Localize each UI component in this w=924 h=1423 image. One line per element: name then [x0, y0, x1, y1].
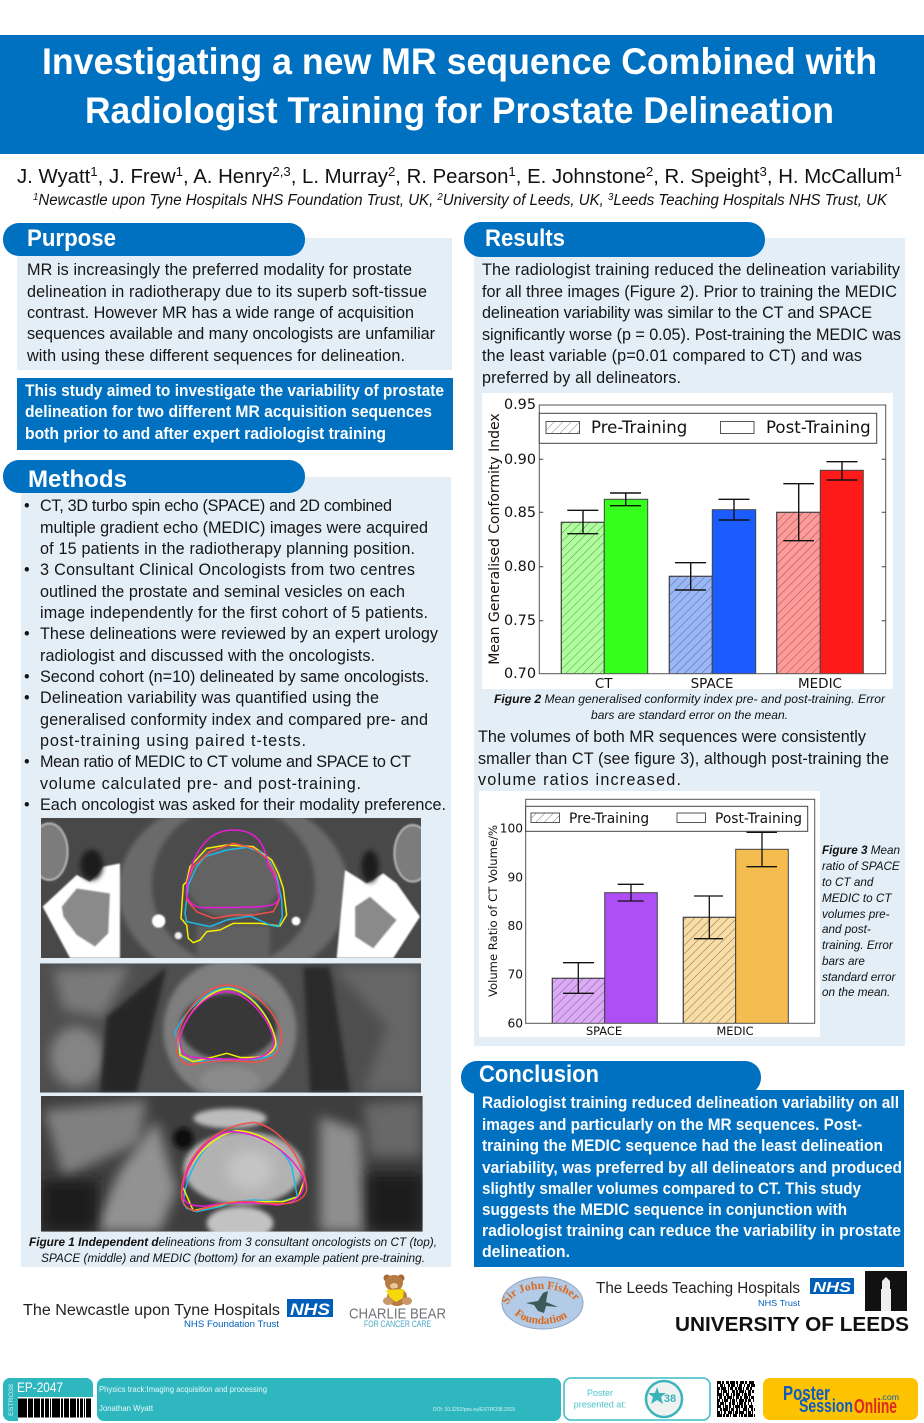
chart 2 axes: MEDIC: [716, 1024, 754, 1038]
methods bullet list: These delineations were reviewed by an expert urology: [40, 625, 439, 643]
aim callout: This study aimed to investigate the variability of prostate: [25, 382, 444, 400]
panel: purpose: [3, 223, 452, 370]
methods bullet list: CT, 3D turbo spin echo (SPACE) and 2D combined: [40, 497, 392, 515]
contours: [181, 830, 287, 943]
figure 3 caption: on the mean.: [822, 986, 890, 999]
chart 2 axes: SPACE: [586, 1024, 622, 1038]
panel: methods: Methods: [28, 466, 127, 493]
title banner: Investigating a new MR sequence Combined with: [42, 41, 877, 82]
methods bullet list: Mean ratio of MEDIC to CT volume and SPACE to CT: [40, 753, 411, 771]
figure 3 caption: [822, 844, 900, 999]
authors and affiliations: University of Leeds, UK,: [443, 192, 608, 209]
logo: Leeds Teaching Hospitals NHS: NHS Trust: [758, 1299, 801, 1308]
conclusion text: [482, 1094, 902, 1261]
logo: Charlie Bear: CHARLIE BEAR: [349, 1306, 446, 1322]
aim callout: both prior to and after expert radiologist training: [25, 425, 386, 443]
panel: purpose: with using these different sequences for delineation.: [26, 347, 405, 365]
methods bullet list: Each oncologist was asked for their modality preference.: [40, 796, 446, 814]
logo: Sir John Fisher Foundation: Foundation: [514, 1308, 568, 1324]
conclusion text: Radiologist training reduced delineation variability on all: [482, 1094, 899, 1112]
authors and affiliations: , E. Johnstone: [516, 166, 646, 188]
chart 2 axes: 70: [507, 968, 523, 982]
aim callout: delineation for two different MR acquisition sequences: [25, 403, 432, 421]
figure 3 caption: and post-: [822, 923, 871, 936]
methods bullet list: image independently for the first cohort of 5 patients.: [40, 604, 428, 622]
authors and affiliations: 2: [388, 164, 395, 179]
conclusion text: slightly smaller volumes compared to CT. This study: [482, 1180, 861, 1198]
footer: poster id and barcode: ESTRO38: [8, 1384, 15, 1416]
methods bullet list: •: [24, 668, 30, 686]
panel: conclusion: Conclusion: [479, 1061, 599, 1088]
chart 2 axes: [486, 799, 815, 1038]
chart 1 axes: 0.90: [504, 452, 536, 468]
title banner: Radiologist Training for Prostate Delineation: [85, 90, 834, 131]
figure 3 caption: bars are: [822, 955, 865, 968]
chart 1 legend: [539, 413, 877, 443]
panel: purpose: Purpose: [27, 225, 116, 252]
methods bullet list: •: [24, 625, 30, 643]
panel: results: [464, 222, 905, 1046]
figure 1 caption: Figure 1 Independent delineations from 3 consultant oncologists on CT (top),: [29, 1235, 437, 1249]
logo: Newcastle hospitals NHS: The Newcastle upon Tyne Hospitals: [23, 1302, 280, 1319]
methods bullet list: multiple gradient echo (MEDIC) images were acquired: [40, 519, 428, 537]
authors and affiliations: Leeds Teaching Hospitals NHS Trust, UK: [613, 192, 888, 209]
methods bullet list: •: [24, 689, 30, 707]
results text: [482, 261, 901, 387]
figure 3 caption: ratio of SPACE: [822, 860, 900, 873]
authors and affiliations: 1: [895, 164, 902, 179]
aim callout: [17, 378, 453, 450]
chart 2 axes: 90: [507, 870, 523, 884]
authors and affiliations: [17, 164, 902, 209]
footer: PosterSessionOnline logo: .com: [880, 1393, 899, 1402]
methods bullet list: •: [24, 753, 30, 771]
panel: purpose: sequences available and many oncologists are unfamiliar: [27, 325, 436, 343]
conclusion text: variability, was preferred by all delineators and produced: [482, 1159, 902, 1177]
chart 1 axes: 0.80: [504, 559, 536, 575]
figure 2 caption: [494, 692, 886, 722]
chart 2 axes: 60: [507, 1016, 523, 1030]
chart 2 axes: 80: [507, 919, 523, 933]
methods bullet list: Delineation variability was quantified using the: [40, 689, 379, 707]
footer: PosterSessionOnline logo: Poster: [783, 1383, 830, 1405]
logo: Newcastle hospitals NHS: [23, 1299, 333, 1330]
volumes text: smaller than CT (see figure 3), although post-training the: [478, 750, 889, 768]
volumes text: The volumes of both MR sequences were consistently: [478, 728, 867, 746]
results text: significantly worse (p = 0.05). Post-training the MEDIC was: [482, 326, 901, 344]
figure 1 caption: SPACE (middle) and MEDIC (bottom) for an example patient pre-training.: [41, 1251, 425, 1265]
results text: preferred by all delineators.: [482, 369, 681, 387]
authors and affiliations: 2,3: [272, 164, 291, 179]
chart 1 axes: CT: [595, 676, 613, 692]
conclusion text: suggests the MEDIC sequence in conjunction with: [482, 1201, 847, 1219]
footer: PosterSessionOnline logo: Session: [799, 1396, 853, 1416]
authors and affiliations: Newcastle upon Tyne Hospitals NHS Foundation Trust, UK,: [38, 192, 437, 209]
methods bullet list: Second cohort (n=10) delineated by same oncologists.: [40, 668, 429, 686]
methods bullet list: •: [24, 561, 30, 579]
methods bullet list: post-training using paired t-tests.: [40, 732, 306, 750]
authors and affiliations: , L. Murray: [291, 166, 388, 188]
icon: teddy bear: [383, 1274, 412, 1306]
footer: presented at ESTRO 38: Poster: [587, 1388, 613, 1398]
logo: Leeds Teaching Hospitals NHS: [596, 1278, 854, 1308]
figure 3 caption: MEDIC to CT: [822, 892, 892, 905]
conclusion text: images and particularly on the MR sequences. Post-: [482, 1116, 862, 1134]
authors and affiliations: , J. Frew: [98, 166, 176, 188]
authors and affiliations: 1: [90, 164, 98, 179]
chart 1 axes: 0.70: [504, 666, 536, 682]
figure 3 caption: training. Error: [822, 939, 894, 952]
chart 1 axes: SPACE: [691, 676, 733, 692]
footer: QR code: [717, 1381, 755, 1417]
chart 2 legend: [526, 806, 808, 831]
chart 2 legend: Pre-Training: [569, 811, 649, 827]
volumes text: volume ratios increased.: [478, 771, 681, 789]
results text: delineation variability was similar to the CT and SPACE: [482, 304, 872, 322]
figure 3 caption: to CT and: [822, 876, 874, 889]
figure 3 caption: Figure 3 Mean: [822, 844, 900, 857]
conclusion text: training the MEDIC sequence had the least delineation: [482, 1137, 883, 1155]
methods bullet list: generalised conformity index and compared pre- and: [40, 711, 428, 729]
footer: track and author bar: Physics track:Imaging acquisition and processing: [99, 1384, 267, 1394]
footer: track and author bar: Jonathan Wyatt: [99, 1403, 154, 1413]
barcode: [18, 1398, 91, 1418]
bar chart: volume ratio of CT volume: [479, 791, 820, 1038]
logo: Newcastle hospitals NHS: NHS Foundation Trust: [184, 1319, 279, 1330]
methods bullet list: [24, 497, 446, 814]
bar chart: mean generalised conformity index: [482, 393, 893, 692]
figure 1 caption: [29, 1235, 437, 1265]
footer: track and author bar: DOI: 10.3252/pos eu/ESTRO38.2019: [433, 1407, 515, 1413]
methods bullet list: •: [24, 497, 30, 515]
panel: conclusion: [461, 1061, 904, 1267]
image: CT scan with delineations: [41, 818, 421, 958]
logo: Charlie Bear: FOR CANCER CARE: [364, 1319, 431, 1329]
chart 1 legend: Post-Training: [766, 418, 871, 437]
authors and affiliations: , A. Henry: [183, 166, 272, 188]
logo: University of Leeds: UNIVERSITY OF LEEDS: [675, 1313, 909, 1336]
chart 2 legend: Post-Training: [715, 811, 802, 827]
figure 3 caption: standard error: [822, 971, 897, 984]
footer: poster id and barcode: EP-2047: [17, 1379, 63, 1395]
authors and affiliations: 3: [608, 192, 614, 203]
logo: Leeds Teaching Hospitals NHS: NHS: [813, 1279, 851, 1296]
logo: University of Leeds: [675, 1271, 909, 1336]
authors and affiliations: 1: [508, 164, 516, 179]
authors and affiliations: , R. Speight: [653, 166, 760, 188]
authors and affiliations: 1: [33, 192, 38, 203]
authors and affiliations: , H. McCallum: [767, 166, 895, 188]
authors and affiliations: J. Wyatt: [17, 166, 89, 188]
authors and affiliations: 3: [760, 164, 767, 179]
conclusion text: radiologist training can reduce the variability in prostate: [482, 1222, 901, 1240]
authors and affiliations: 1: [176, 164, 183, 179]
title banner: [0, 35, 924, 154]
panel: purpose: contrast. However MR has a wide range of acquisition: [27, 304, 414, 322]
methods bullet list: of 15 patients in the radiotherapy planning position.: [40, 540, 415, 558]
chart 2 axes: Volume Ratio of CT Volume/%: [486, 825, 500, 997]
contours: [175, 985, 282, 1065]
footer: presented at ESTRO 38: presented at:: [574, 1400, 626, 1410]
authors and affiliations: 2: [436, 192, 443, 203]
logo: Charlie Bear: [349, 1274, 446, 1329]
authors and affiliations: 2: [646, 164, 653, 179]
results text: the least variable (p=0.01 compared to CT) and was: [482, 347, 862, 365]
panel: purpose: MR is increasingly the preferred modality for prostate: [27, 261, 412, 279]
panel: results: Results: [485, 225, 565, 252]
chart 1 axes: Mean Generalised Conformity Index: [487, 413, 503, 665]
icon: kingfisher: [526, 1291, 558, 1313]
chart 1 axes: MEDIC: [798, 676, 842, 692]
figure 2 caption: Figure 2 Mean generalised conformity index pre- and post-training. Error: [494, 692, 886, 706]
conclusion text: delineation.: [482, 1243, 570, 1261]
chart 1 axes: 0.75: [504, 613, 536, 629]
panel: methods: [3, 460, 451, 1267]
chart 2 axes: 100: [500, 822, 523, 836]
methods bullet list: outlined the prostate and seminal vesicles on each: [40, 583, 405, 601]
logo: Sir John Fisher Foundation: Sir John Fisher: [502, 1282, 579, 1304]
footer: PosterSessionOnline logo: Online: [854, 1396, 897, 1418]
authors and affiliations: , R. Pearson: [395, 166, 508, 188]
chart 1 axes: [487, 397, 886, 692]
methods bullet list: 3 Consultant Clinical Oncologists from two centres: [40, 561, 415, 579]
methods bullet list: radiologist and discussed with the oncologists.: [40, 647, 375, 665]
contours: [181, 1122, 307, 1212]
chart 1 axes: 0.85: [504, 505, 536, 521]
footer: poster id and barcode: [3, 1378, 93, 1421]
footer: PosterSessionOnline logo: [763, 1378, 918, 1420]
logo: Newcastle hospitals NHS: NHS: [290, 1300, 331, 1319]
chart 1 axes: 0.95: [504, 397, 536, 413]
chart 1 legend: Pre-Training: [591, 418, 687, 437]
image: MEDIC MR with delineations: [41, 1096, 423, 1240]
methods bullet list: •: [24, 796, 30, 814]
footer: presented at ESTRO 38: 38: [664, 1393, 676, 1405]
figure 3 caption: volumes pre-: [822, 908, 890, 921]
logo: Sir John Fisher Foundation: [502, 1276, 584, 1330]
methods bullet list: volume calculated pre- and post-training.: [40, 775, 361, 793]
results text: for all three images (Figure 2). Prior to training the MEDIC: [482, 283, 897, 301]
results text: The radiologist training reduced the delineation variability: [482, 261, 901, 279]
footer: presented at ESTRO 38: [564, 1378, 710, 1420]
logo: Leeds Teaching Hospitals NHS: The Leeds Teaching Hospitals: [596, 1280, 800, 1297]
panel: purpose: delineation in radiotherapy due to its superb soft-tissue: [27, 283, 427, 301]
footer: track and author bar: [97, 1378, 561, 1421]
image: SPACE MR with delineations: [40, 960, 421, 1100]
figure 2 caption: bars are standard error on the mean.: [591, 708, 788, 722]
volumes text: [478, 728, 889, 789]
